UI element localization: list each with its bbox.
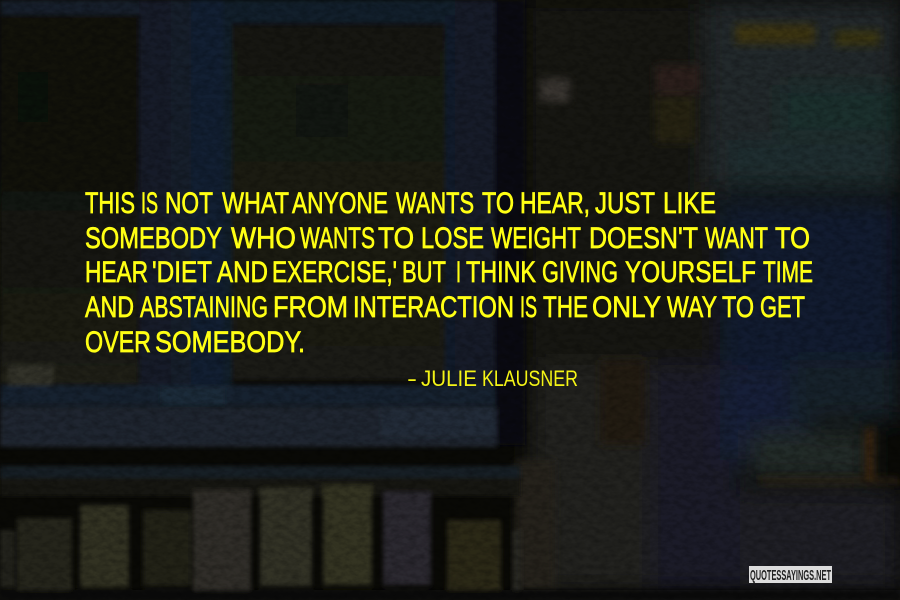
attribution: KLAUSNER: [482, 366, 578, 391]
line 4: TO: [722, 291, 754, 324]
line 2: WANT: [705, 222, 768, 255]
line 1: IS: [141, 187, 158, 220]
window frame: [0, 0, 139, 15]
line 2: [85, 222, 810, 255]
line 2: TO: [378, 222, 414, 255]
line 2: DOESN'T: [589, 222, 698, 255]
line 1: ANYONE: [292, 187, 388, 220]
line 4: FROM: [273, 291, 348, 324]
lower wall band: [0, 466, 520, 478]
line 4: ABSTAINING: [140, 291, 268, 324]
line 4: ONLY: [592, 291, 661, 324]
line 1: [85, 187, 716, 220]
wall: right side plaster: [525, 0, 900, 590]
line 3: BUT: [402, 256, 446, 289]
line 1: LIKE: [663, 187, 716, 220]
line 1: WHAT: [222, 187, 289, 220]
watermark: [749, 566, 832, 584]
line 2: SOMEBODY: [85, 222, 222, 255]
line 2: WEIGHT: [491, 222, 581, 255]
line 1: HEAR,: [520, 187, 590, 220]
line 3: AND: [217, 256, 268, 289]
line 4: AND: [85, 291, 134, 324]
line 2: WANTS: [300, 222, 375, 255]
line 4: THE: [543, 291, 588, 324]
bricks: [0, 530, 15, 588]
line 5: OVER: [85, 326, 151, 359]
window sill: [0, 385, 495, 407]
attribution: JULIE: [421, 366, 477, 391]
bottom shadow: [0, 590, 900, 600]
line 3: GIVING: [542, 256, 618, 289]
line 3: HEAR: [85, 256, 148, 289]
line 2: TO: [775, 222, 810, 255]
line 5: [85, 326, 305, 359]
line 1: THIS: [85, 187, 135, 220]
line 1: NOT: [165, 187, 213, 220]
line 4: INTERACTION: [353, 291, 514, 324]
line 4: GET: [760, 291, 805, 324]
line 2: WHO: [231, 222, 296, 255]
line 4: [85, 291, 805, 324]
line 1: TO: [482, 187, 514, 220]
attribution: [407, 366, 578, 391]
line 3: YOURSELF: [625, 256, 756, 289]
line 4: IS: [520, 291, 537, 324]
line 5: SOMEBODY.: [155, 326, 305, 359]
attribution: -: [407, 366, 417, 391]
line 1: WANTS: [396, 187, 474, 220]
line 3: EXERCISE,': [272, 256, 397, 289]
quote text: [85, 187, 813, 359]
window panes: [0, 16, 138, 384]
line 3: 'DIET: [152, 256, 212, 289]
line 2: LOSE: [421, 222, 484, 255]
wall patches: [515, 24, 900, 590]
line 3: I: [456, 256, 461, 289]
line 3: THINK: [466, 256, 536, 289]
line 3: [85, 256, 813, 289]
line 4: WAY: [667, 291, 717, 324]
line 3: TIME: [763, 256, 813, 289]
line 1: JUST: [595, 187, 655, 220]
